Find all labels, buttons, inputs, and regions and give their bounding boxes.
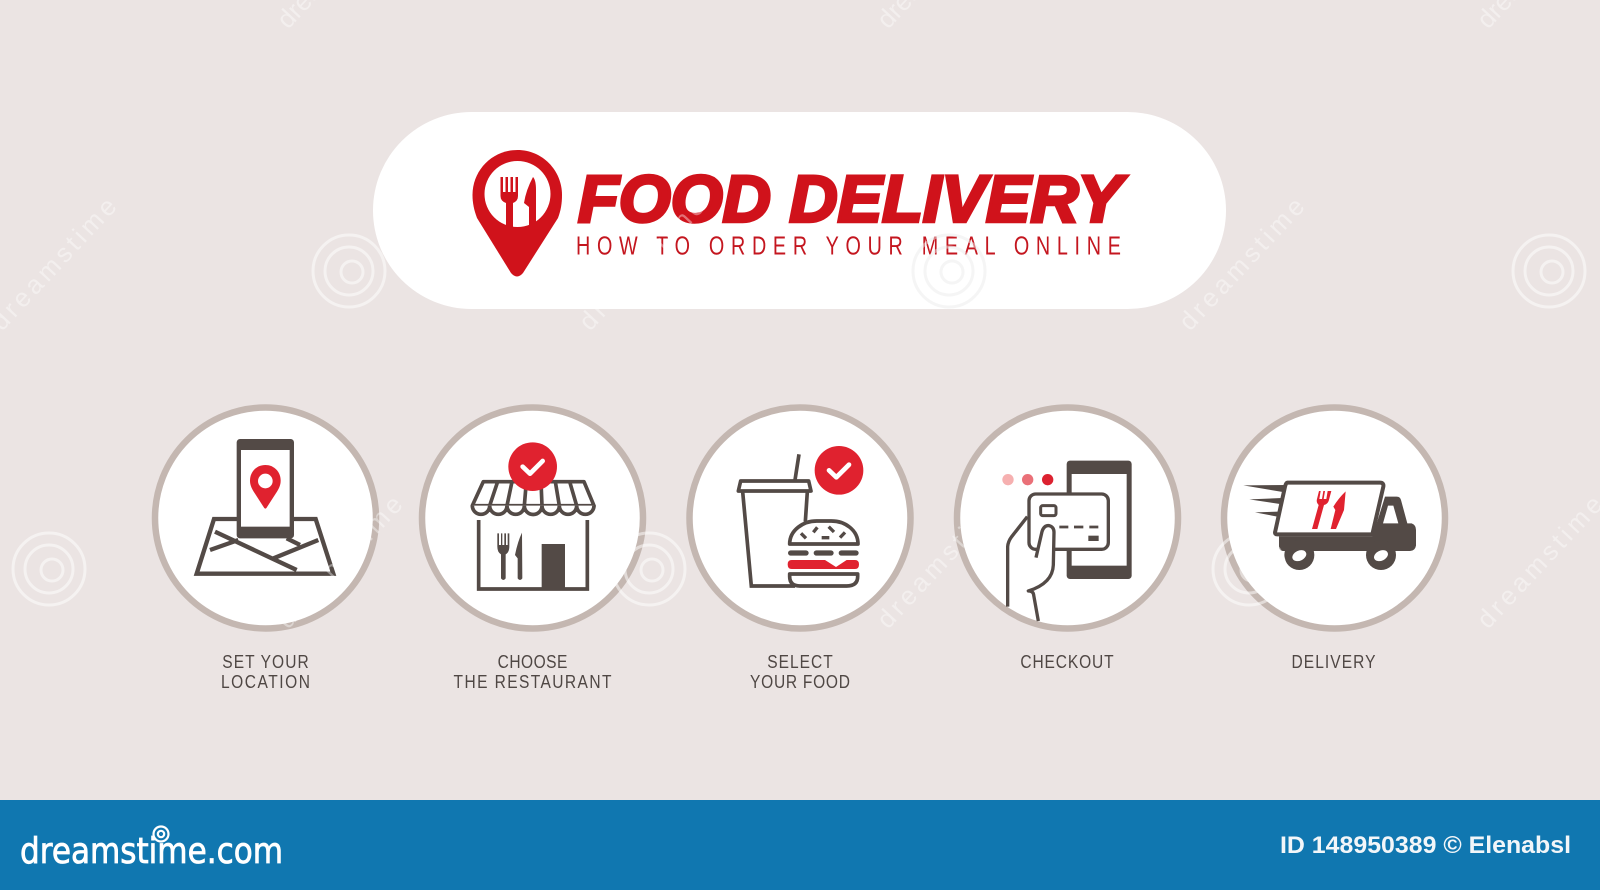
- label: THE RESTAURANT: [454, 672, 612, 692]
- header pill: [373, 112, 1226, 309]
- label: [221, 652, 310, 692]
- icon: location pin with cutlery: [472, 150, 562, 276]
- label: SET YOUR: [222, 652, 309, 672]
- footer bar: [0, 800, 1600, 890]
- icon: spiral logo: [154, 826, 168, 842]
- step 4: checkout: [957, 408, 1178, 672]
- icon: delivery truck: [1243, 483, 1416, 570]
- watermark overlay: dreamstime: [870, 489, 1008, 634]
- step 5: delivery: [1224, 408, 1445, 672]
- label: [454, 652, 612, 692]
- watermark overlay: dreamstime: [572, 191, 710, 336]
- circle: [1224, 408, 1445, 628]
- title: FOOD DELIVERY: [578, 162, 1127, 236]
- icon: restaurant storefront: [472, 442, 594, 590]
- watermark overlay: dreamstime: [1172, 191, 1310, 336]
- watermark overlay: dreamstime: [270, 489, 408, 634]
- image credit: ID 148950389 © Elenabsl: [1280, 832, 1571, 859]
- circle: [957, 408, 1178, 628]
- label: YOUR FOOD: [750, 672, 850, 692]
- label: CHOOSE: [498, 652, 567, 672]
- site name: dreamstime.com: [20, 831, 283, 872]
- watermark overlay: [0, 0, 1600, 634]
- step 2: choose the restaurant: [422, 408, 643, 692]
- circle: [422, 408, 643, 628]
- icon: drink and burger: [738, 446, 863, 586]
- icon: hand holding credit card and phone: [1002, 461, 1132, 621]
- label: LOCATION: [221, 672, 310, 692]
- label: SELECT: [767, 652, 833, 672]
- icon: phone on map: [197, 439, 333, 574]
- label: [750, 652, 850, 692]
- label: DELIVERY: [1291, 652, 1376, 672]
- label: CHECKOUT: [1020, 652, 1114, 672]
- circle: [155, 408, 376, 628]
- step 1: set your location: [155, 408, 376, 692]
- circle: [690, 408, 910, 628]
- subtitle: HOW TO ORDER YOUR MEAL ONLINE: [576, 231, 1121, 260]
- step 3: select your food: [690, 408, 910, 692]
